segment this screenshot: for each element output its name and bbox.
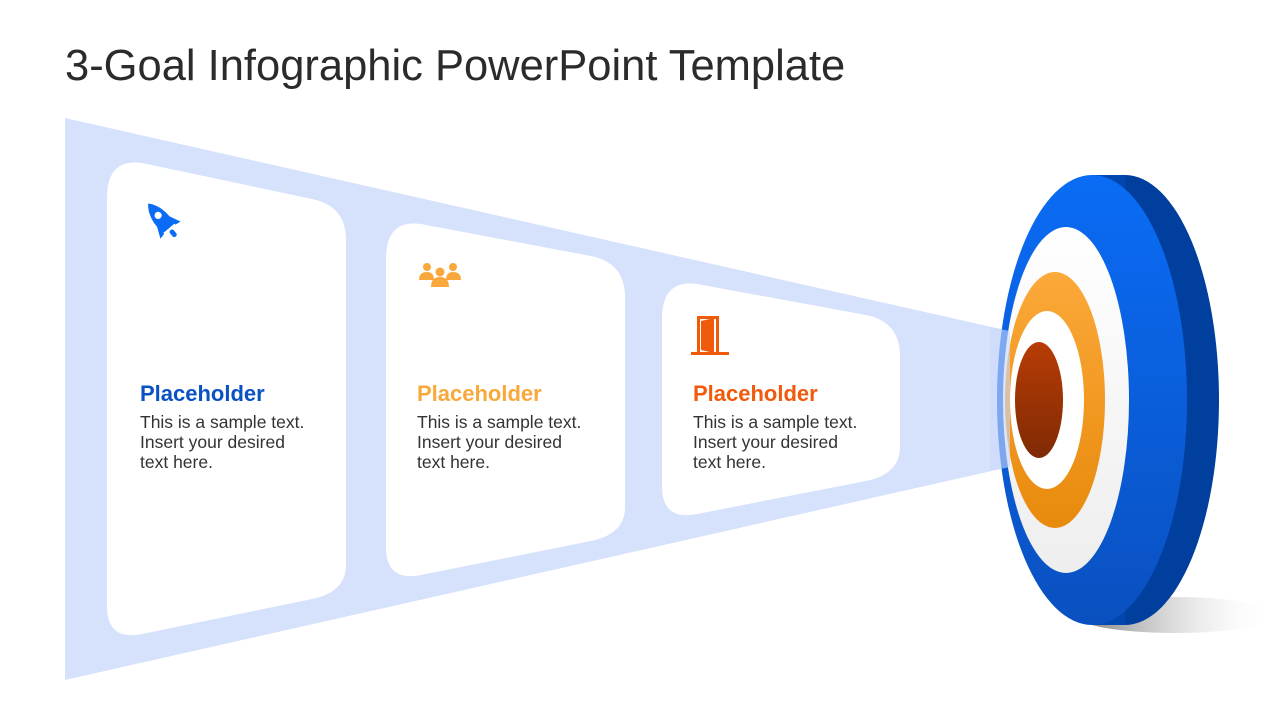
card 3 text: Placeholder xyxy=(693,381,818,406)
beam xyxy=(65,118,1005,680)
card 2 text: This is a sample text. Insert your desired text here. xyxy=(417,412,581,472)
beam overlay on target xyxy=(990,327,1010,471)
icon: door xyxy=(691,316,729,355)
icon: rocket xyxy=(138,195,186,245)
card 1 text xyxy=(140,381,304,472)
card 1 text: This is a sample text. Insert your desired text here. xyxy=(140,412,304,472)
title: 3-Goal Infographic PowerPoint Template xyxy=(65,42,845,90)
card 2 xyxy=(386,223,625,576)
icon: people xyxy=(419,263,461,287)
card 3 xyxy=(662,283,900,515)
card 1 text: Placeholder xyxy=(140,381,265,406)
card 3 text: This is a sample text. Insert your desired text here. xyxy=(693,412,857,472)
card 3 text xyxy=(693,381,857,472)
card 2 text xyxy=(417,381,581,472)
card 2 text: Placeholder xyxy=(417,381,542,406)
card 1 xyxy=(107,162,346,635)
target xyxy=(997,175,1275,633)
